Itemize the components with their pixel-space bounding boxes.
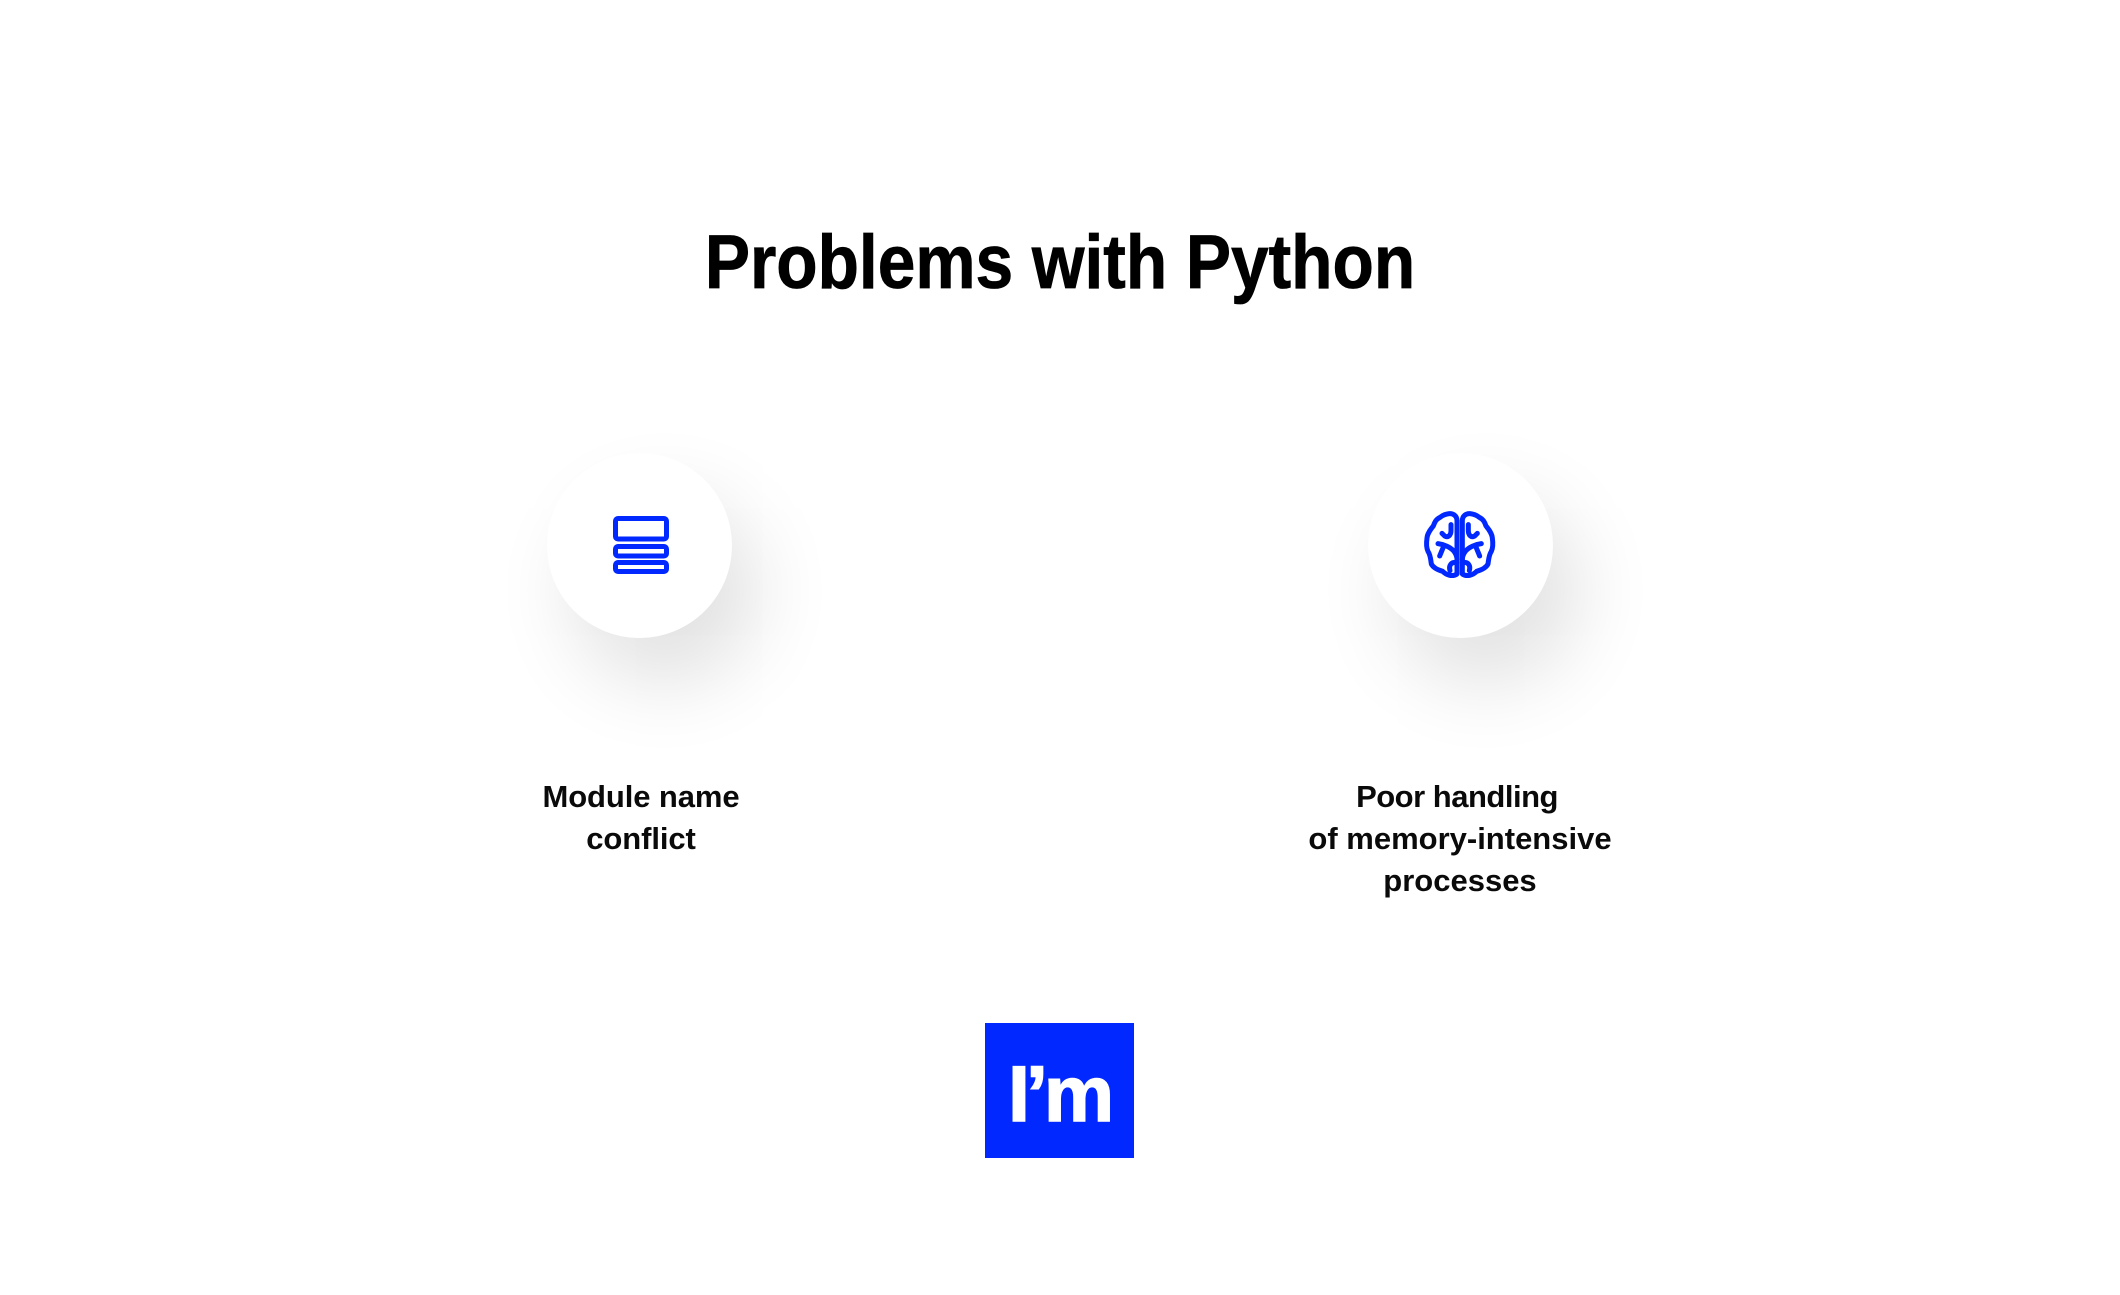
icon circle: module name conflict <box>547 453 732 638</box>
panel: poor memory handling <box>1308 508 1612 898</box>
label: module name conflict: Module name <box>542 779 739 814</box>
title: Problems with Python <box>705 220 1415 305</box>
label: poor memory handling: Poor handling <box>1356 779 1558 814</box>
panel: module name conflict <box>542 506 768 856</box>
icon circle: poor memory handling <box>1368 453 1553 638</box>
label: poor memory handling: of memory-intensive <box>1308 821 1612 856</box>
label: poor memory handling <box>1308 779 1612 898</box>
label: module name conflict: conflict <box>586 821 696 856</box>
logo <box>985 1023 1134 1158</box>
icon: stacked rows <box>613 516 669 574</box>
label: poor memory handling: processes <box>1383 863 1537 898</box>
logo: I’m <box>1008 1049 1110 1138</box>
label: module name conflict <box>542 779 739 856</box>
icon: brain <box>1424 511 1496 578</box>
